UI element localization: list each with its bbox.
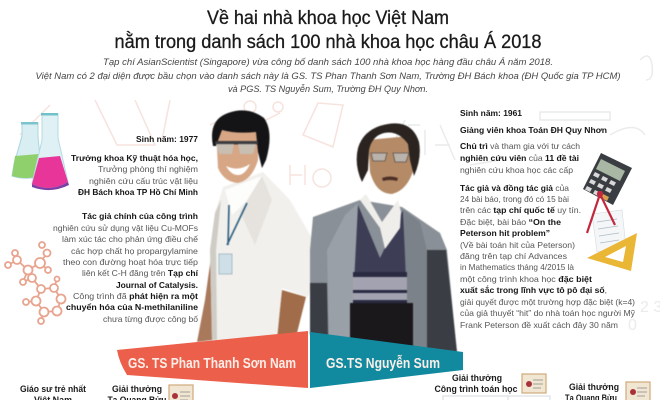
award: Tạ Quang Bửu, right [565, 382, 650, 400]
text block: profile of Nguyễn Sum: nghiên cứu viên của 11 đề tài [460, 153, 579, 163]
icon: compass [587, 192, 615, 233]
text block: profile of Nguyễn Sum: Chủ trì và tham gia với tư cách [460, 141, 580, 151]
background watermark: chemistry and math doodles [20, 56, 660, 334]
text block: profile of Phan Thanh Sơn Nam: theo con đường hoạt hóa trực tiếp [63, 257, 198, 267]
text block: profile of Phan Thanh Sơn Nam: chưa từng được công bố [103, 314, 198, 324]
award: Tạ Quang Bửu, left [108, 384, 193, 400]
text block: profile of Phan Thanh Sơn Nam: Sinh năm: 1977 [136, 134, 198, 144]
text block: profile of Nguyễn Sum: đăng trên tạp chí Advances [460, 251, 567, 261]
text block: profile of Nguyễn Sum: Sinh năm: 1961 [460, 108, 522, 118]
award: Tạ Quang Bửu, left: Giải thưởng [112, 384, 162, 394]
title: nằm trong danh sách 100 nhà khoa học châu Á 2018 [114, 31, 542, 53]
text block: profile of Nguyễn Sum: Frank Peterson đề xuất cách đây 30 năm [460, 320, 618, 330]
text block: profile of Nguyễn Sum: của giả thuyết “hit” do nhà toán học người Mỹ [460, 308, 636, 318]
text block: profile of Nguyễn Sum: 24 bài báo, trong đó có 15 bài [460, 194, 569, 204]
text block: profile of Nguyễn Sum: Giảng viên khoa Toán ĐH Quy Nhơn [460, 125, 607, 135]
text block: profile of Nguyễn Sum: một công trình khoa học đặc biệt [460, 274, 592, 284]
text block: profile of Nguyễn Sum: nghiên cứu khoa học các cấp [460, 165, 573, 175]
text block: profile of Nguyễn Sum: trên các tạp chí quốc tế uy tín. [460, 205, 581, 215]
text block: profile of Phan Thanh Sơn Nam: Tác giả chính của công trình [82, 211, 198, 221]
text block: profile of Nguyễn Sum [460, 108, 636, 330]
text block: profile of Phan Thanh Sơn Nam: các hợp chất họ propargylamine [71, 246, 198, 256]
intro text [36, 57, 620, 95]
icon: set square [587, 233, 637, 271]
text block: profile of Nguyễn Sum: giải quyết được một trường hợp đặc biệt (k=4) [460, 297, 635, 307]
text block: profile of Phan Thanh Sơn Nam: nghiên cứu cấu trúc vật liệu [89, 176, 198, 186]
intro text: Việt Nam có 2 đại diện được bầu chọn vào danh sách này là GS. TS Phan Thanh Sơn Nam, Trường ĐH Bách khoa (ĐH Quốc gia TP HCM) [36, 71, 620, 82]
intro text: Tạp chí AsianScientist (Singapore) vừa công bố danh sách 100 nhà khoa học hàng đầu châu Á năm 2018. [103, 57, 553, 68]
background watermark: chemistry and math doodles: 0 [628, 317, 637, 334]
award: mathematical work prize [434, 373, 550, 400]
ribbon: Phan Thanh Sơn Nam [117, 331, 308, 388]
text block: profile of Phan Thanh Sơn Nam: Công trình đã phát hiện ra một [73, 291, 198, 301]
text block: profile of Nguyễn Sum: (Về bài toán hit của Peterson) [460, 240, 575, 250]
text block: profile of Nguyễn Sum: xuất sắc trong lĩnh vực tô pô đại số , [460, 284, 607, 295]
award: Tạ Quang Bửu, right: Giải thưởng [569, 382, 619, 392]
award: mathematical work prize: Công trình toán học [434, 384, 518, 394]
ribbon: Nguyễn Sum: GS.TS Nguyễn Sum [326, 355, 440, 372]
portrait: Phan Thanh Sơn Nam [197, 110, 320, 342]
text block: profile of Nguyễn Sum: in Mathematics tháng 4/2015 là [460, 262, 574, 272]
text block: profile of Phan Thanh Sơn Nam: Trưởng phòng thí nghiệm [98, 164, 198, 174]
award: mathematical work prize: Giải thưởng [452, 373, 502, 383]
title [114, 8, 542, 53]
award: youngest professor: Giáo sư trẻ nhất [20, 384, 86, 394]
text block: profile of Phan Thanh Sơn Nam: chuyển hóa của N-methilaniline [66, 302, 198, 312]
text block: profile of Phan Thanh Sơn Nam: làm xúc tác cho phản ứng điều chế [62, 234, 198, 244]
text block: profile of Phan Thanh Sơn Nam: nghiên cứu sử dụng vật liệu Cu-MOFs [53, 223, 198, 233]
icon: molecule [5, 242, 66, 324]
text block: profile of Phan Thanh Sơn Nam: liên kết C-H đăng trên Tạp chí [82, 268, 199, 278]
icon: chemistry flasks [12, 113, 69, 190]
intro text: và PGS. TS Nguyễn Sum, Trường ĐH Quy Nhơn. [228, 84, 428, 95]
text block: profile of Nguyễn Sum: Đặc biệt, bài báo “On the [460, 217, 561, 227]
title: Về hai nhà khoa học Việt Nam [207, 8, 449, 29]
award: youngest professor [20, 384, 86, 400]
text block: profile of Phan Thanh Sơn Nam: ĐH Bách khoa TP Hồ Chí Minh [78, 187, 198, 197]
portrait: Nguyễn Sum [310, 123, 457, 352]
ribbon: Nguyễn Sum [310, 332, 463, 388]
text block: profile of Phan Thanh Sơn Nam: Journal of Catalysis. [116, 280, 198, 290]
ribbon: Phan Thanh Sơn Nam: GS. TS Phan Thanh Sơn Nam [128, 355, 296, 372]
text block: profile of Nguyễn Sum: Peterson hit problem” [460, 228, 550, 238]
icon: calculator [583, 153, 632, 205]
icon: notepaper [592, 210, 626, 252]
text block: profile of Phan Thanh Sơn Nam: Trưởng khoa Kỹ thuật hóa học, [71, 153, 198, 163]
text block: profile of Nguyễn Sum: Tác giả và đồng tác giả của [460, 183, 569, 193]
text block: profile of Phan Thanh Sơn Nam [53, 134, 199, 324]
